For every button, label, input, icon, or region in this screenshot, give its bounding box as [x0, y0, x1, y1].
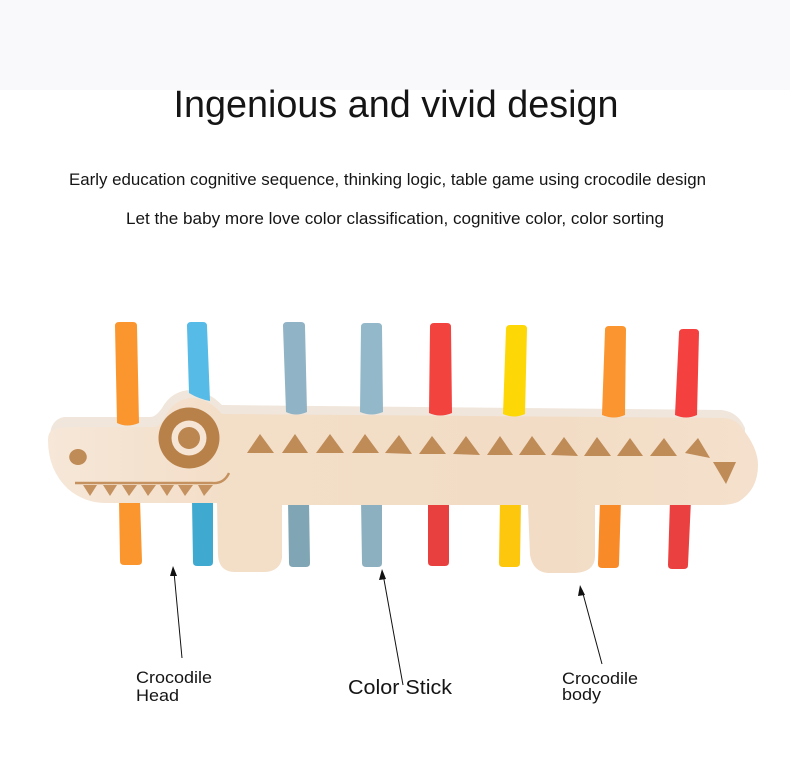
callout arrows	[170, 566, 602, 685]
upper color sticks	[115, 322, 699, 426]
yellow stick	[503, 325, 527, 416]
grey-blue stick	[283, 322, 307, 414]
engraved nostril	[69, 449, 87, 465]
wood front face with legs	[48, 398, 758, 573]
engraved eye	[158, 408, 220, 468]
lower stick segments	[119, 500, 691, 569]
grey-blue stick	[360, 323, 383, 414]
description line 1: Early education cognitive sequence, thinking logic, table game using crocodile design	[69, 171, 706, 189]
red stick	[675, 329, 699, 418]
title: Ingenious and vivid design	[174, 84, 618, 126]
arrow: color stick	[379, 569, 403, 685]
engraved mouth and teeth	[75, 473, 229, 496]
blue stick	[187, 322, 210, 401]
wood top surface	[50, 390, 745, 440]
crocodile wooden body	[48, 390, 758, 573]
arrow: crocodile head	[170, 566, 182, 658]
description line 2: Let the baby more love color classification, cognitive color, color sorting	[126, 210, 664, 228]
red stick	[429, 323, 452, 416]
label: crocodile head	[136, 668, 212, 705]
label: crocodile head: Head	[136, 686, 179, 705]
label: color stick: Color Stick	[348, 677, 453, 699]
engraved back triangles	[247, 434, 736, 484]
arrow: crocodile body	[578, 585, 602, 664]
crocodile toy illustration	[48, 322, 758, 573]
label: crocodile body: Crocodile	[562, 669, 638, 688]
orange stick	[602, 326, 626, 418]
label: crocodile body: body	[562, 685, 602, 704]
label: crocodile head: Crocodile	[136, 668, 212, 687]
orange stick	[115, 322, 139, 426]
label: crocodile body	[562, 669, 638, 704]
